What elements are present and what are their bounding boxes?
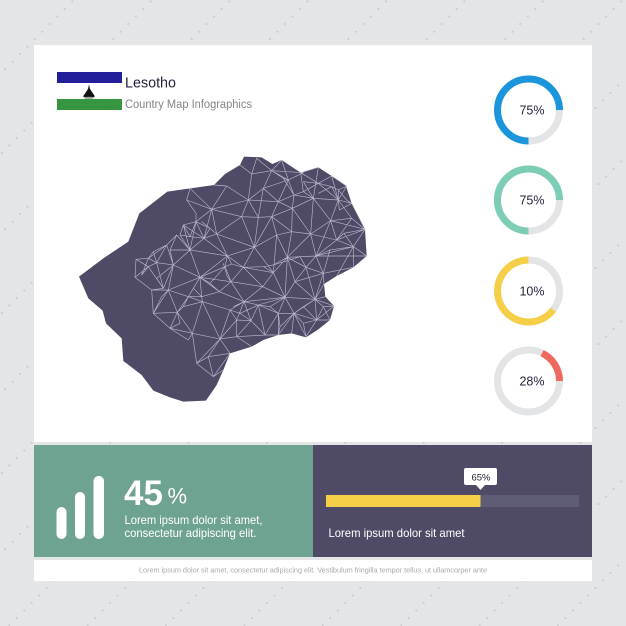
- title: Lesotho: [125, 74, 176, 92]
- donut: 75% blue: [497, 79, 560, 141]
- icon: bar signal: [56, 476, 104, 539]
- statistic description: [124, 514, 262, 540]
- donut: 28% red: 28%: [519, 374, 545, 388]
- tooltip: 65%: [464, 468, 497, 490]
- panel: footer: [34, 560, 592, 581]
- tooltip: 65%: 65%: [471, 472, 491, 484]
- map silhouette: [79, 157, 367, 402]
- statistic value: 45: [124, 474, 163, 513]
- flag of Lesotho: [57, 72, 122, 110]
- subtitle: Country Map Infographics: [125, 99, 252, 111]
- donut: 10% yellow: [498, 260, 560, 322]
- statistic description: Lorem ipsum dolor sit amet,: [124, 514, 262, 527]
- statistic percent sign: %: [168, 484, 187, 508]
- icon: mokorotlo hat: [83, 84, 95, 99]
- map: Lesotho low-poly: [79, 157, 367, 402]
- donut: 75% teal: 75%: [519, 194, 545, 208]
- footer text: Lorem ipsum dolor sit amet, consectetur adipiscing elit. Vestibulum fringilla tempor tellus, ut ullamcorper ante: [139, 566, 487, 574]
- donut: 28% red: [498, 350, 560, 412]
- panel: dark progress: [313, 445, 592, 557]
- progress fill: [326, 495, 480, 507]
- progress track: [326, 495, 579, 507]
- donut: 75% blue: 75%: [519, 104, 545, 118]
- panel: green statistic: [34, 445, 313, 557]
- panel: main map area: [34, 45, 592, 442]
- donut: 75% teal: [497, 169, 560, 231]
- donut: 10% yellow: 10%: [519, 284, 545, 298]
- map triangulated mesh: [135, 158, 367, 377]
- progress caption: Lorem ipsum dolor sit amet: [328, 526, 465, 540]
- statistic description: consectetur adipiscing elit.: [124, 527, 256, 540]
